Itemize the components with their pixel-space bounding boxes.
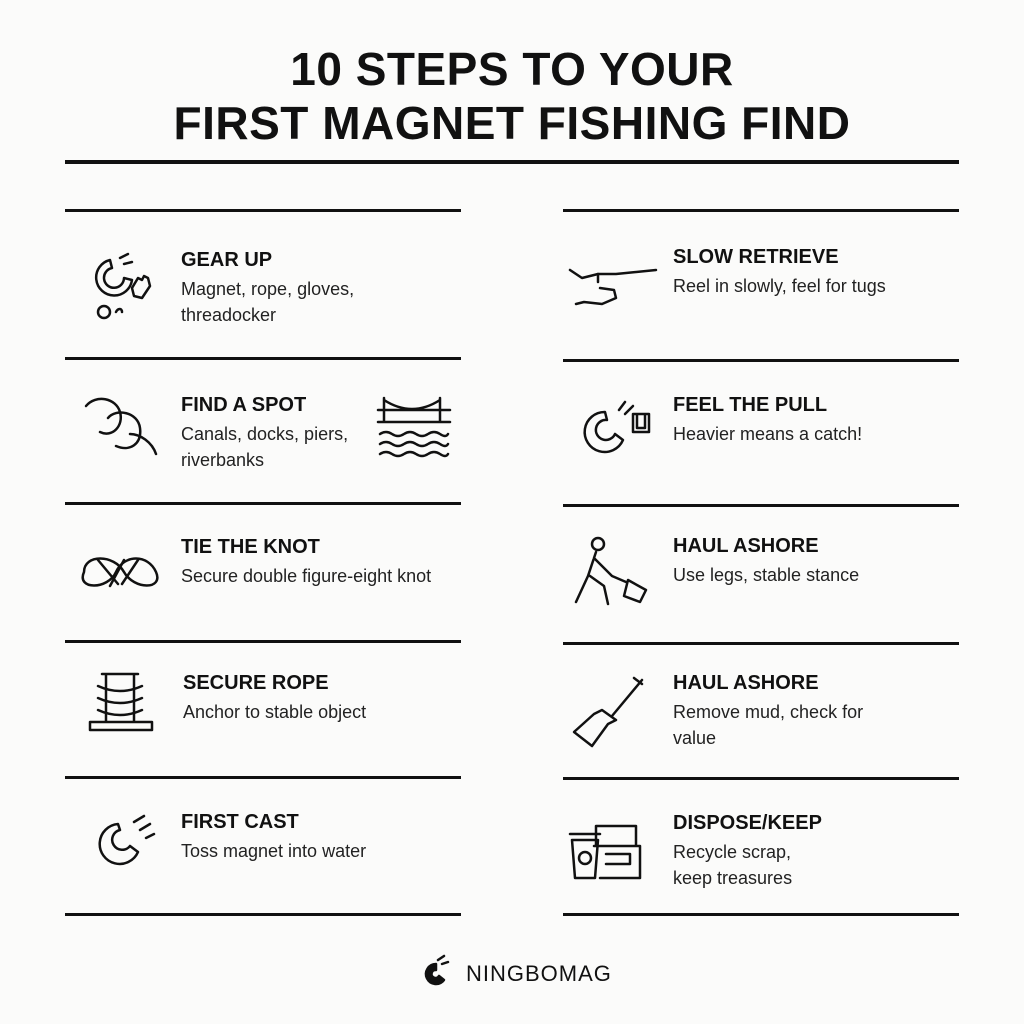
step: clean find (673, 672, 863, 748)
step: slow retrieve: SLOW RETRIEVE (673, 246, 839, 268)
step: gear up: Magnet, rope, gloves, (181, 279, 354, 299)
step: feel the pull (673, 394, 862, 444)
step: feel the pull: Heavier means a catch! (673, 424, 862, 444)
step: find a spot: riverbanks (181, 450, 264, 470)
step: first cast: FIRST CAST (181, 811, 299, 833)
icon: hand (568, 268, 658, 306)
icon: bollard (88, 672, 154, 732)
step: dispose/keep (673, 812, 822, 888)
step: haul ashore (673, 535, 859, 585)
footer logo: NINGBOMAG (466, 961, 612, 986)
step: find a spot (181, 394, 348, 470)
step: slow retrieve (673, 246, 886, 296)
step: tie the knot: Secure double figure-eight knot (181, 566, 431, 586)
footer logo (424, 954, 612, 986)
step: gear up (181, 249, 354, 325)
step: secure rope: SECURE ROPE (183, 672, 329, 694)
step: find a spot: Canals, docks, piers, (181, 424, 348, 444)
title: FIRST MAGNET FISHING FIND (174, 97, 850, 149)
icon: knot (81, 557, 159, 588)
step: haul ashore: HAUL ASHORE (673, 535, 819, 557)
step: secure rope: Anchor to stable object (183, 702, 366, 722)
step: slow retrieve: Reel in slowly, feel for tugs (673, 276, 886, 296)
step: gear up: threadocker (181, 305, 276, 325)
step: secure rope (183, 672, 366, 722)
step: dispose/keep: DISPOSE/KEEP (673, 812, 822, 834)
step: haul ashore: Use legs, stable stance (673, 565, 859, 585)
icon: gear (94, 252, 152, 320)
icon: magnet pull (583, 400, 650, 454)
icon: person (574, 536, 648, 606)
icon: bridge (376, 396, 452, 458)
icon: brush (572, 676, 644, 748)
step: tie the knot: TIE THE KNOT (181, 536, 320, 558)
step: dispose/keep: keep treasures (673, 868, 792, 888)
step: clean find: Remove mud, check for (673, 702, 863, 722)
step: clean find: HAUL ASHORE (673, 672, 819, 694)
icon: chain (84, 398, 158, 456)
step: first cast: Toss magnet into water (181, 841, 366, 861)
step: gear up: GEAR UP (181, 249, 272, 271)
step: feel the pull: FEEL THE PULL (673, 394, 827, 416)
step: first cast (181, 811, 366, 861)
step: dispose/keep: Recycle scrap, (673, 842, 791, 862)
title: 10 STEPS TO YOUR (290, 43, 734, 95)
step: tie the knot (181, 536, 431, 586)
step: clean find: value (673, 728, 716, 748)
icon: magnet cast (98, 814, 156, 866)
step: find a spot: FIND A SPOT (181, 394, 306, 416)
icon: bin and chest (568, 824, 642, 880)
title (174, 43, 850, 149)
